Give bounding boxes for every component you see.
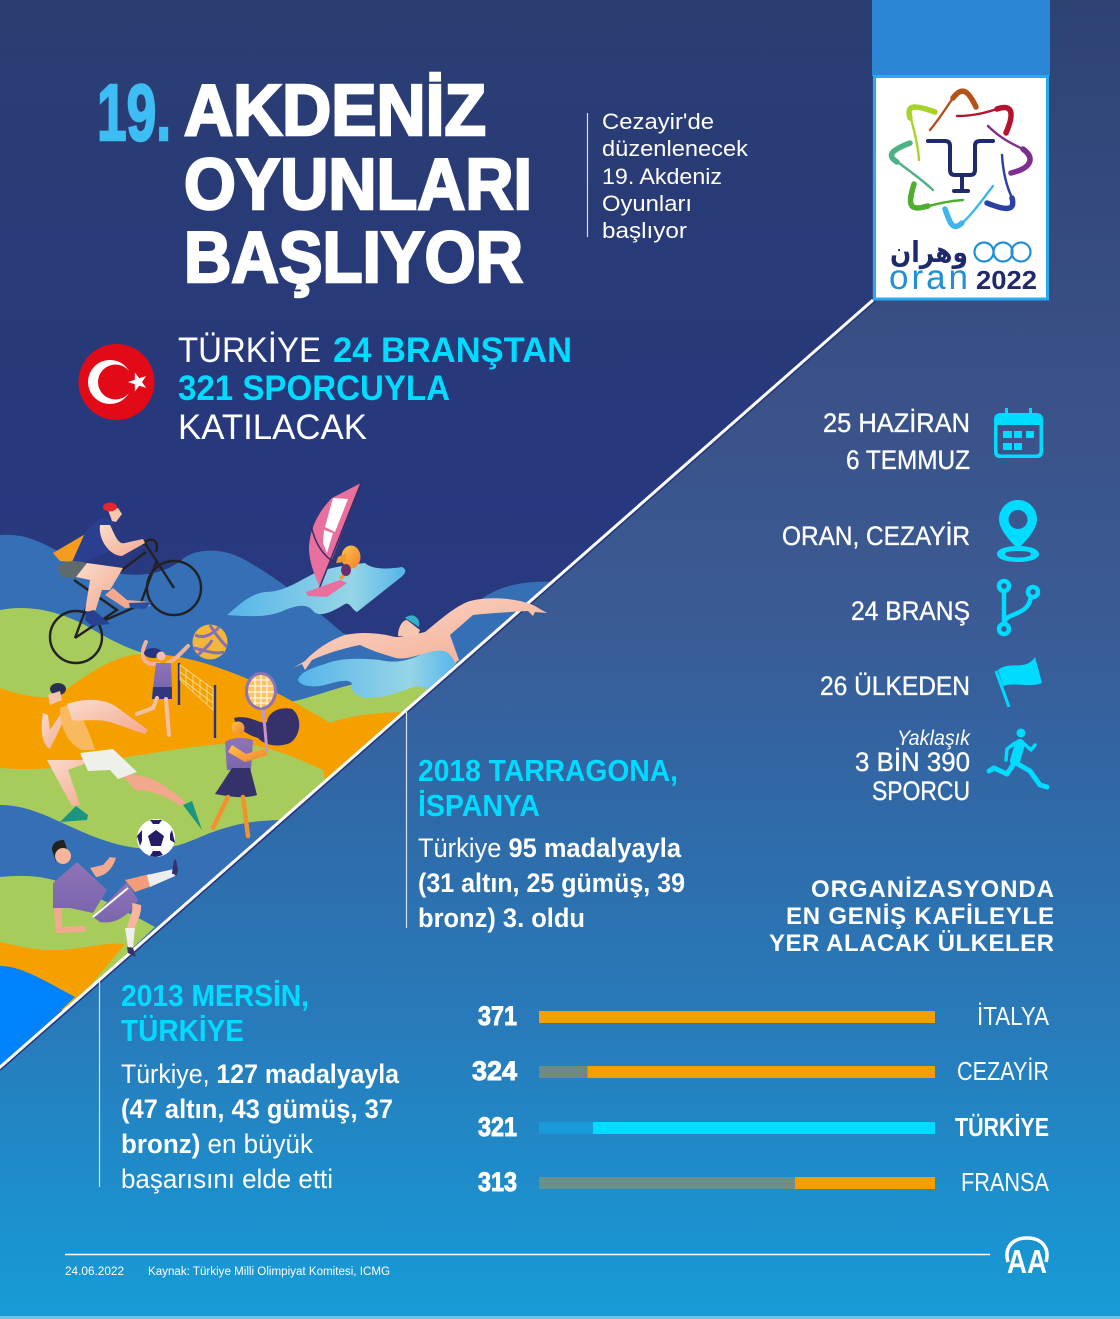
- arm: [228, 745, 268, 762]
- shorts: [80, 749, 137, 779]
- fact: location: ORAN, CEZAYİR: [782, 520, 970, 551]
- icon: branch: [999, 581, 1038, 634]
- icon: calendar: [994, 408, 1043, 458]
- singlet: [60, 703, 95, 750]
- sail: [309, 483, 361, 586]
- fact: dates: [823, 407, 1043, 475]
- arm up: [90, 857, 116, 877]
- shorts: [152, 687, 172, 699]
- intro text: Oyunları: [602, 191, 692, 216]
- AA logo: AA: [1007, 1243, 1047, 1280]
- wave: [227, 563, 405, 616]
- title line 3: BAŞLIYOR: [184, 218, 523, 298]
- hair: [234, 708, 299, 745]
- bar: Cezayir: 324: [472, 1056, 517, 1086]
- shorts stripe: [93, 888, 128, 917]
- intro text: Cezayir'de: [602, 109, 714, 134]
- bar: Fransa: [478, 1167, 1049, 1197]
- shorts: [57, 561, 87, 578]
- hill: orange: [0, 654, 402, 780]
- icon: map pin: [997, 500, 1039, 562]
- hill: lower green band: [0, 876, 155, 960]
- legs: [213, 797, 248, 836]
- turkish flag icon: [78, 344, 154, 420]
- source: Kaynak: Türkiye Milli Olimpiyat Komitesi, ICMG: [148, 1266, 390, 1278]
- head: [156, 652, 166, 660]
- bar: Cezayir: [472, 1056, 1049, 1086]
- leg to ball: [125, 874, 152, 892]
- swim cap: [405, 615, 419, 627]
- text block: 2013 Mersin: bronz) en büyük: [121, 1129, 314, 1159]
- head: [398, 620, 420, 637]
- fact: dates: 25 HAZİRAN: [823, 407, 970, 438]
- sports illustration: [0, 483, 560, 1070]
- oran wordmark: oran: [889, 258, 968, 297]
- logo white card: [874, 76, 1048, 299]
- figure: swimmer: [293, 598, 547, 698]
- logo panel: [872, 0, 1050, 299]
- arabic wordmark: وهران: [890, 235, 968, 269]
- hill: bottom orange: [0, 942, 125, 1010]
- hill: blue band: [0, 805, 285, 960]
- front arm: [67, 700, 148, 734]
- front thigh and shin: [47, 760, 95, 806]
- hill: bottom bright blue: [0, 966, 75, 1067]
- bar: Cezayir: CEZAYİR: [957, 1057, 1049, 1086]
- turkiye statement: TÜRKİYE: [178, 331, 321, 370]
- text block: 2018 Tarragona: Türkiye 95 madalyayla: [418, 833, 681, 863]
- title line 2: OYUNLARI: [184, 145, 532, 225]
- hill: green back: [0, 608, 430, 1000]
- racket: [246, 674, 276, 752]
- hill: lower green: [0, 744, 323, 770]
- fact: countries: [820, 657, 1042, 707]
- logo star mark: [891, 91, 1030, 226]
- back leg: [105, 588, 150, 608]
- turkiye statement: [78, 331, 572, 447]
- raised shoe: [173, 860, 177, 874]
- icon: flag: [996, 657, 1042, 707]
- hair: [144, 648, 162, 658]
- sail panels: [323, 498, 348, 553]
- bar: Turkiye: 321: [478, 1112, 517, 1142]
- player arms: [143, 642, 188, 664]
- figure: windsurfer: [227, 483, 405, 616]
- bar chart: [472, 1001, 1049, 1197]
- back arm: [42, 712, 66, 749]
- arm: [100, 525, 145, 556]
- soccer ball: [137, 819, 175, 857]
- skirt: [215, 768, 257, 797]
- fact: dates: 6 TEMMUZ: [846, 445, 970, 475]
- figure: runner: [42, 683, 202, 830]
- sock: [147, 869, 175, 887]
- shoe: [85, 610, 110, 626]
- text block: 2018 Tarragona: (31 altın, 25 gümüş, 39: [418, 868, 685, 898]
- figure: tennis player: [213, 674, 299, 836]
- turkiye statement: KATILACAK: [178, 408, 367, 447]
- backpack: [53, 534, 84, 562]
- torso: [72, 518, 113, 563]
- bar: Italya: 371: [478, 1001, 517, 1031]
- icon: runner: [989, 728, 1047, 787]
- standing leg: [127, 903, 141, 928]
- intro text: [588, 109, 749, 243]
- bottom edge strip: [0, 1316, 1120, 1319]
- text block: 2013 Mersin: TÜRKİYE: [121, 1013, 244, 1048]
- bar: Turkiye: TÜRKİYE: [955, 1113, 1049, 1142]
- text block: 2013 Mersin: 2013 MERSİN,: [121, 978, 309, 1013]
- turkiye statement: 24 BRANŞTAN: [333, 331, 572, 370]
- turkiye statement: 321 SPORCUYLA: [178, 369, 450, 408]
- date: 24.06.2022: [65, 1266, 124, 1278]
- dress: [153, 663, 172, 688]
- mast: [311, 483, 361, 589]
- intro text: düzenlenecek: [602, 136, 749, 161]
- head: [108, 508, 122, 522]
- text block: 2013 Mersin: [100, 978, 399, 1194]
- title: [97, 68, 532, 298]
- face: [55, 848, 71, 864]
- fact: countries: 26 ÜLKEDEN: [820, 671, 970, 701]
- title line 1: AKDENİZ: [184, 71, 486, 151]
- back leg: [120, 772, 186, 806]
- text block: 2013 Mersin: (47 altın, 43 gümüş, 37: [121, 1094, 393, 1124]
- text block: 2018 Tarragona: bronz) 3. oldu: [418, 903, 585, 933]
- background upper left triangle: [0, 0, 872, 1067]
- bar: Fransa: FRANSA: [961, 1169, 1049, 1197]
- chart heading: [769, 876, 1054, 957]
- bicycle: [50, 540, 201, 663]
- figure: soccer player: [52, 840, 177, 957]
- fact: athletes: 3 BİN 390: [855, 746, 970, 777]
- helmet: [103, 502, 117, 512]
- hair: [52, 840, 67, 862]
- fact: location: [782, 500, 1039, 562]
- text block: 2013 Mersin: başarısını elde etti: [121, 1164, 333, 1194]
- face: [48, 691, 62, 705]
- legs: [137, 698, 169, 735]
- bar: Fransa: 313: [478, 1167, 517, 1197]
- text block: 2018 Tarragona: [406, 710, 685, 933]
- logo year: 2022: [976, 265, 1037, 295]
- bar: Turkiye: [478, 1112, 1049, 1142]
- front shoe: [60, 806, 88, 822]
- fact: athletes: [855, 727, 1047, 806]
- intro text: 19. Akdeniz: [602, 164, 722, 189]
- shirt: [53, 862, 107, 913]
- back shoe: [183, 801, 202, 830]
- figure: volleyball player and net: [137, 624, 228, 738]
- text block: 2013 Mersin: Türkiye, 127 madalyayla: [121, 1059, 399, 1089]
- chart heading: YER ALACAK ÜLKELER: [769, 930, 1054, 957]
- text block: 2018 Tarragona: 2018 TARRAGONA,: [418, 753, 678, 788]
- body and arms: [293, 598, 547, 670]
- shorts: [93, 882, 138, 923]
- top: [225, 738, 253, 770]
- fact: branches: [851, 581, 1038, 634]
- net: [179, 663, 215, 738]
- intro text: başlıyor: [602, 218, 688, 243]
- water: [298, 649, 457, 698]
- chart heading: ORGANİZASYONDA: [811, 876, 1054, 903]
- logo rings: [974, 242, 1030, 262]
- chart heading: EN GENİŞ KAFİLEYLE: [786, 903, 1054, 930]
- text block: 2018 Tarragona: İSPANYA: [418, 788, 540, 823]
- sock standing: [125, 928, 135, 947]
- footer: [65, 1238, 1047, 1280]
- diagonal divider: [0, 300, 875, 1070]
- hill: blue back: [0, 535, 560, 1070]
- fact: athletes: SPORCU: [872, 776, 970, 806]
- facts list: [782, 407, 1047, 806]
- logo top band: [872, 0, 1050, 76]
- fact: branches: 24 BRANŞ: [851, 596, 970, 626]
- hair: [50, 683, 66, 695]
- head: [232, 722, 244, 734]
- board: [306, 580, 347, 597]
- fact: athletes: Yaklaşık: [897, 727, 971, 750]
- rider: [336, 546, 360, 580]
- figure: cyclist: [50, 502, 201, 663]
- volleyball: [192, 624, 228, 660]
- standing shoe: [127, 947, 136, 957]
- bar: Italya: [478, 1001, 1049, 1031]
- arm down: [54, 908, 86, 933]
- title number: 19.: [97, 68, 171, 157]
- bar: Italya: İTALYA: [977, 1002, 1049, 1031]
- thigh and shin: [76, 563, 123, 612]
